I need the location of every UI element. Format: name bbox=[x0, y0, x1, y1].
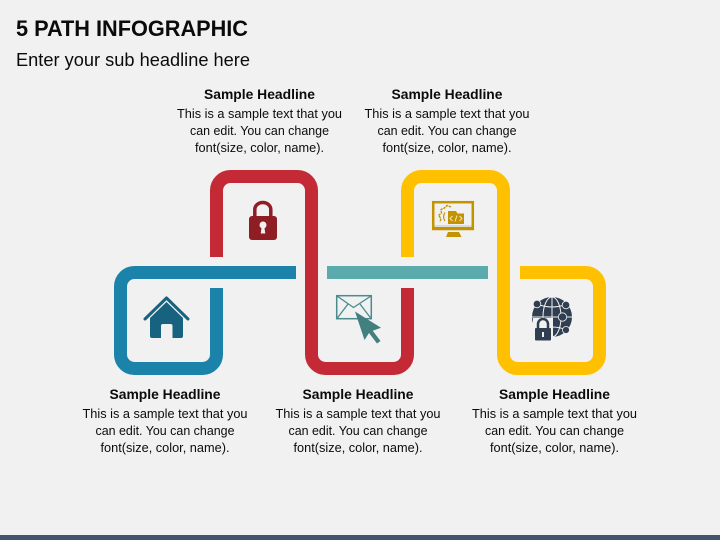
text block: top right: can edit. You can change bbox=[378, 124, 517, 138]
text block: top right: Sample Headline bbox=[392, 87, 503, 102]
text block: bottom right bbox=[472, 387, 637, 455]
path 3: teal bar bbox=[327, 266, 488, 279]
text block: bottom left bbox=[82, 387, 248, 455]
text block: top right: This is a sample text that you bbox=[364, 107, 530, 121]
title: 5 PATH INFOGRAPHIC bbox=[16, 16, 248, 41]
icon: globe with padlock bbox=[532, 297, 572, 342]
text block: bottom left: can edit. You can change bbox=[96, 424, 235, 438]
text block: bottom right: Sample Headline bbox=[499, 387, 610, 402]
text block: bottom center bbox=[276, 387, 441, 455]
path 4: yellow bbox=[408, 176, 600, 368]
path 1: blue bbox=[120, 272, 296, 368]
icon: padlock bbox=[249, 203, 277, 240]
text block: bottom left: font(size, color, name). bbox=[100, 441, 230, 455]
footer bar bbox=[0, 535, 720, 540]
text block: bottom center: This is a sample text that you bbox=[276, 407, 441, 421]
text block: top left: Sample Headline bbox=[204, 87, 315, 102]
icon: monitor with code folder bbox=[432, 202, 474, 237]
text block: bottom center: font(size, color, name). bbox=[294, 441, 422, 455]
text block: bottom right: can edit. You can change bbox=[485, 424, 624, 438]
text block: bottom right: font(size, color, name). bbox=[490, 441, 619, 455]
text block: top left: This is a sample text that you bbox=[177, 107, 342, 121]
text block: bottom center: can edit. You can change bbox=[288, 424, 428, 438]
icon: house bbox=[145, 298, 188, 338]
text block: bottom left: This is a sample text that you bbox=[82, 407, 248, 421]
text block: top left bbox=[177, 87, 342, 155]
icon: envelope with cursor bbox=[337, 296, 381, 344]
text block: bottom left: Sample Headline bbox=[110, 387, 221, 402]
text block: top right bbox=[364, 87, 530, 155]
text block: top left: font(size, color, name). bbox=[195, 141, 324, 155]
text block: top left: can edit. You can change bbox=[190, 124, 329, 138]
text block: top right: font(size, color, name). bbox=[382, 141, 512, 155]
subtitle: Enter your sub headline here bbox=[16, 49, 250, 70]
text block: bottom right: This is a sample text that you bbox=[472, 407, 637, 421]
path 2: red bbox=[216, 176, 408, 368]
text block: bottom center: Sample Headline bbox=[302, 387, 414, 402]
